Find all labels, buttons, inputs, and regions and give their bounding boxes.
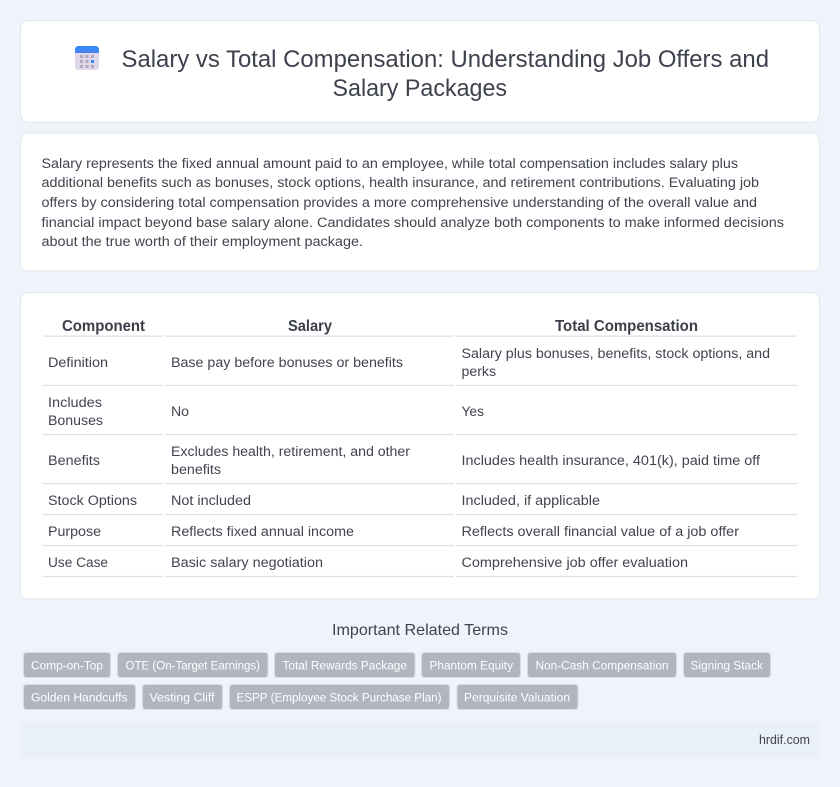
title bbox=[122, 46, 769, 102]
text block: summary bbox=[42, 156, 784, 250]
row: definition: Base pay before bonuses or benefits bbox=[171, 355, 403, 371]
row: includes bonuses: Includes bbox=[48, 395, 102, 411]
text block: summary: financial impact beyond base salary alone. Candidates should analyze both components to make informed decisions bbox=[42, 215, 784, 231]
tags: related terms bbox=[24, 652, 770, 710]
footer bbox=[20, 723, 820, 757]
row: includes bonuses: Bonuses bbox=[48, 413, 103, 429]
row: benefits: Excludes health, retirement, and other bbox=[171, 444, 410, 460]
text block: summary: about the true worth of their employment package. bbox=[42, 234, 363, 250]
table rules bbox=[43, 336, 797, 577]
row: benefits: Includes health insurance, 401(k), paid time off bbox=[462, 453, 760, 469]
row: definition: perks bbox=[462, 364, 496, 380]
row: use case: Basic salary negotiation bbox=[171, 555, 323, 571]
row: stock options: Included, if applicable bbox=[462, 493, 600, 509]
text block: summary: offers by considering total compensation provides a more comprehensive understanding of the overall value and bbox=[42, 195, 757, 211]
tags: related terms: Comp-on-Top bbox=[31, 658, 103, 672]
tags: related terms: OTE (On-Target Earnings) bbox=[126, 658, 260, 672]
tags: related terms: Perquisite Valuation bbox=[464, 690, 570, 704]
title: Salary vs Total Compensation: Understanding Job Offers and bbox=[122, 46, 769, 73]
panel: summary paragraph bbox=[20, 133, 820, 271]
row: benefits bbox=[48, 444, 760, 478]
row: stock options bbox=[48, 493, 600, 509]
row: stock options: Stock Options bbox=[48, 493, 137, 509]
table header: Component bbox=[62, 318, 145, 335]
row: use case: Comprehensive job offer evaluation bbox=[462, 555, 688, 571]
table header: Total Compensation bbox=[555, 318, 698, 335]
tags: related terms: Total Rewards Package bbox=[282, 658, 407, 672]
row: purpose: Reflects overall financial value of a job offer bbox=[462, 524, 739, 540]
row: stock options: Not included bbox=[171, 493, 251, 509]
row: purpose bbox=[48, 524, 739, 540]
row: includes bonuses bbox=[48, 395, 484, 429]
tags: related terms: Vesting Cliff bbox=[150, 690, 215, 704]
tags: related terms: Non-Cash Compensation bbox=[536, 658, 668, 672]
panel: comparison table bbox=[20, 292, 820, 599]
footer: hrdif.com bbox=[759, 732, 810, 747]
tags: related terms: Phantom Equity bbox=[430, 658, 514, 672]
row: definition: Salary plus bonuses, benefits, stock options, and bbox=[462, 346, 770, 362]
row: definition: Definition bbox=[48, 355, 108, 371]
tags: related terms: Golden Handcuffs bbox=[31, 690, 128, 704]
row: purpose: Purpose bbox=[48, 524, 101, 540]
row: purpose: Reflects fixed annual income bbox=[171, 524, 354, 540]
table header bbox=[62, 318, 698, 335]
heading: important related terms: Important Related Terms bbox=[332, 622, 508, 639]
header card bbox=[20, 20, 820, 122]
text block: summary: additional benefits such as bonuses, stock options, health insurance, and retirement contributions. Evaluating job bbox=[42, 175, 759, 191]
icon: calendar bbox=[75, 46, 99, 70]
row: definition bbox=[48, 346, 770, 380]
tags: related terms: Signing Stack bbox=[690, 658, 764, 672]
row: includes bonuses: No bbox=[171, 404, 189, 420]
row: use case: Use Case bbox=[48, 555, 108, 571]
row: use case bbox=[48, 555, 688, 571]
row: includes bonuses: Yes bbox=[462, 404, 484, 420]
tags: related terms: ESPP (Employee Stock Purchase Plan) bbox=[236, 690, 442, 704]
text block: summary: Salary represents the fixed annual amount paid to an employee, while total compensation includes salary plus bbox=[42, 156, 738, 172]
table header: Salary bbox=[288, 318, 332, 335]
title: Salary Packages bbox=[332, 75, 507, 102]
row: benefits: benefits bbox=[171, 462, 221, 478]
row: benefits: Benefits bbox=[48, 453, 100, 469]
